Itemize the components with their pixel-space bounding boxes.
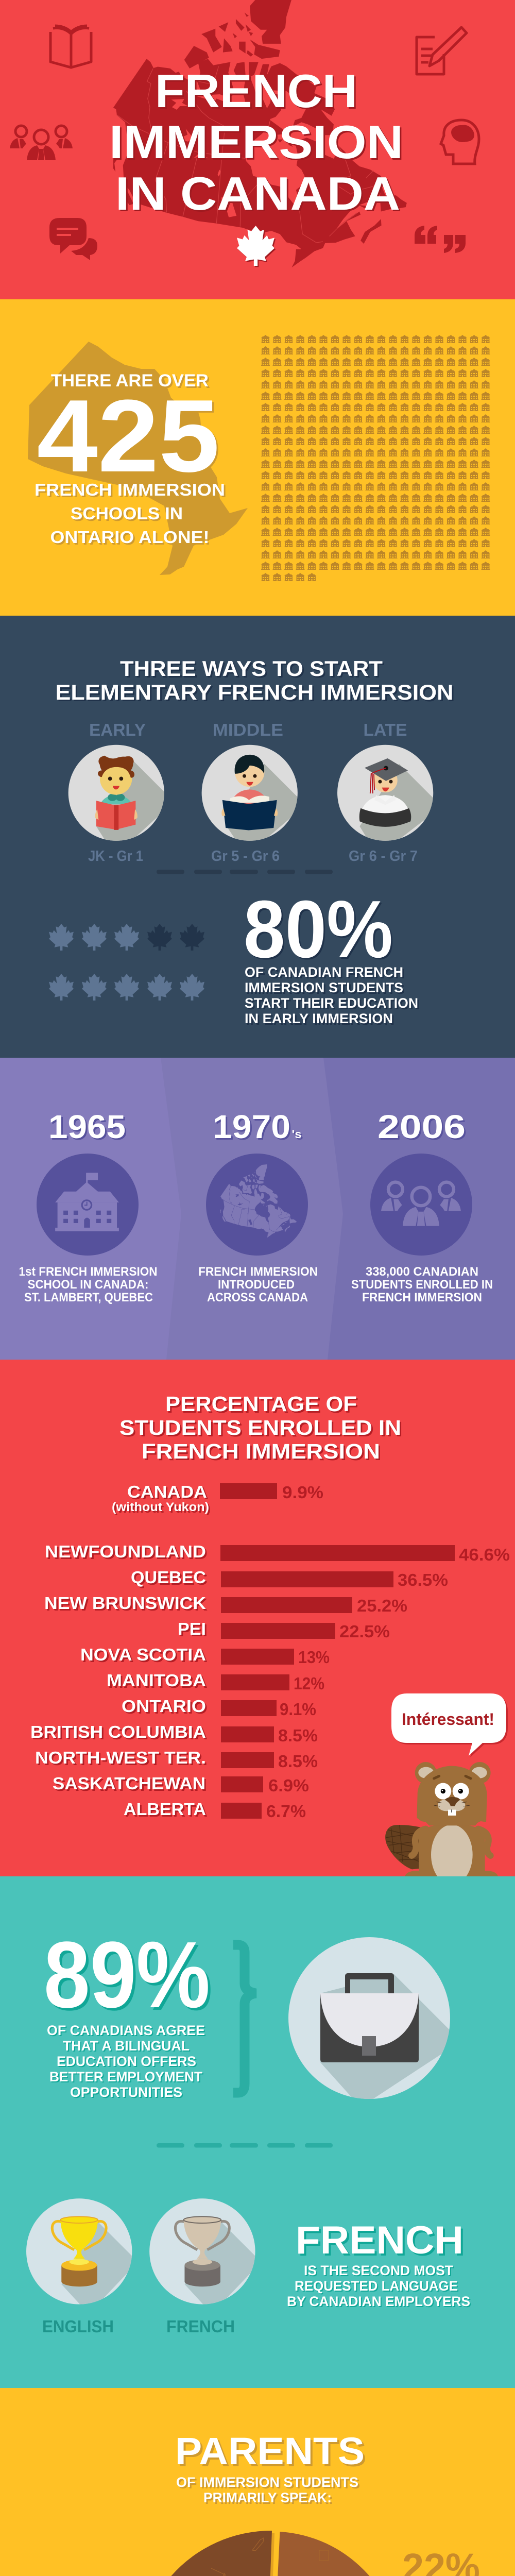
425 schools callout: THERE ARE OVER (51, 371, 209, 391)
icon: quotation marks (415, 226, 466, 253)
timeline: 1970s: INTRODUCED (218, 1278, 295, 1292)
trophy labels: ENGLISH (42, 2317, 114, 2336)
icon: group of people (10, 126, 73, 160)
timeline: 1965: 1st FRENCH IMMERSION (19, 1265, 158, 1279)
speech bubble: Intéressant! (402, 1710, 494, 1728)
timeline: 2006: 338,000 CANADIAN (366, 1265, 478, 1279)
pictogram: 425 school icons (261, 334, 493, 584)
heading: parents: PRIMARILY SPEAK: (203, 2490, 332, 2505)
pictogram: ten maple leaves (49, 924, 204, 1001)
425 schools callout: ONTARIO ALONE! (50, 528, 209, 547)
icon: gold trophy (26, 2198, 132, 2304)
bar chart labels: PEI (178, 1619, 206, 1638)
stage labels (89, 720, 407, 739)
bar chart labels: NORTH-WEST TER. (35, 1748, 206, 1767)
425 schools callout: FRENCH IMMERSION (35, 480, 225, 499)
bar chart labels (30, 1482, 209, 1819)
timeline: 1965: ST. LAMBERT, QUEBEC (24, 1291, 153, 1304)
heading: FRENCH IMMERSION (142, 1439, 380, 1463)
icon: silver trophy (149, 2198, 255, 2304)
stat: French second language: FRENCH (296, 2218, 464, 2262)
425 schools callout (35, 371, 225, 547)
stat: 80 percent: IN EARLY IMMERSION (245, 1011, 393, 1026)
bar chart values: 36.5% (398, 1570, 448, 1589)
bar chart values: 46.6% (459, 1545, 510, 1564)
heading: parents: PARENTS (175, 2430, 365, 2472)
section: enrolment percentages (0, 1360, 515, 1885)
bar chart labels: NOVA SCOTIA (80, 1645, 206, 1664)
bar chart labels: SASKATCHEWAN (53, 1774, 205, 1793)
stage labels: MIDDLE (213, 720, 283, 739)
bar chart bars (220, 1483, 455, 1819)
stat: 89 percent (44, 1922, 210, 2100)
stat: 80 percent: OF CANADIAN FRENCH (245, 964, 403, 980)
bar chart values: 9.1% (280, 1700, 316, 1719)
heading: PERCENTAGE OF (165, 1392, 357, 1416)
timeline: 1970s: FRENCH IMMERSION (198, 1265, 318, 1279)
grade range labels (88, 848, 418, 865)
section: parents (0, 2388, 515, 2576)
bar chart labels: ALBERTA (124, 1800, 206, 1819)
bar chart labels: (without Yukon) (112, 1500, 209, 1514)
stat: 89 percent: OPPORTUNITIES (70, 2084, 182, 2100)
heading: ELEMENTARY FRENCH IMMERSION (56, 680, 454, 704)
icon: small Canada map (220, 1164, 297, 1238)
stat: 89 percent: THAT A BILINGUAL (63, 2038, 190, 2054)
illustrations: students (68, 745, 434, 841)
grade range labels: Gr 6 - Gr 7 (349, 848, 418, 865)
illustration: beaver (385, 1762, 498, 1885)
timeline: 1965: SCHOOL IN CANADA: (28, 1278, 148, 1292)
stat: 80 percent: IMMERSION STUDENTS (245, 980, 403, 995)
icon: boy reading (202, 745, 298, 841)
section: three ways to start (0, 616, 515, 1058)
stat: 89 percent: BETTER EMPLOYMENT (49, 2069, 202, 2084)
pie slice: English (138, 2531, 306, 2576)
timeline: 2006: STUDENTS ENROLLED IN (351, 1278, 493, 1292)
bar chart labels: CANADA (127, 1482, 207, 1501)
stat: 89 percent: 89% (44, 1922, 210, 2027)
title text: IN CANADA (115, 168, 400, 220)
bar chart values: 6.7% (266, 1802, 306, 1821)
icon: notepad and pencil (417, 27, 467, 74)
pie chart (138, 2531, 403, 2576)
title text: FRENCH (155, 65, 357, 117)
timeline: 2006: 2006 (377, 1108, 466, 1145)
trophy labels (42, 2317, 235, 2336)
title text (109, 65, 403, 220)
brace (233, 1945, 256, 2093)
section: Ontario schools (0, 299, 515, 616)
bar chart labels: MANITOBA (107, 1671, 206, 1690)
bar chart values: 22.5% (339, 1622, 390, 1641)
icon: briefcase (288, 1937, 450, 2099)
heading: THREE WAYS TO START (120, 656, 383, 681)
timeline: 1965: 1965 (48, 1108, 126, 1145)
stat: French second language: REQUESTED LANGUAGE (295, 2278, 458, 2294)
icon: chat bubbles (49, 218, 97, 260)
bar chart values: 12% (294, 1674, 324, 1693)
bar chart labels: NEWFOUNDLAND (45, 1542, 206, 1561)
icon: head with brain (441, 120, 479, 164)
425 schools callout: SCHOOLS IN (71, 504, 183, 523)
trophy labels: FRENCH (166, 2317, 235, 2336)
stat: 89 percent: EDUCATION OFFERS (57, 2054, 196, 2069)
timeline: 1970s: 's (291, 1128, 302, 1141)
icon: students group (381, 1182, 461, 1226)
heading: parents: OF IMMERSION STUDENTS (176, 2475, 358, 2490)
bar chart values: 9.9% (282, 1483, 323, 1502)
icon: school (55, 1173, 119, 1231)
title text: IMMERSION (109, 116, 403, 168)
heading (119, 1392, 401, 1463)
timeline: 1970s (198, 1108, 318, 1304)
bar chart values: 6.9% (268, 1776, 309, 1795)
bar chart values: 25.2% (357, 1596, 407, 1615)
bar chart labels: NEW BRUNSWICK (44, 1594, 206, 1613)
stat: French second language: IS THE SECOND MOST (304, 2263, 453, 2278)
map of Canada behind title (113, 0, 407, 267)
pie slice: French (273, 2532, 401, 2576)
heading: parents (175, 2430, 365, 2505)
stat: 89 percent: OF CANADIANS AGREE (47, 2023, 205, 2038)
bar chart labels: QUEBEC (131, 1568, 206, 1587)
425 schools callout: 425 (37, 379, 219, 494)
section: employment (0, 1876, 515, 2388)
stage labels: EARLY (89, 720, 146, 739)
bar chart labels: BRITISH COLUMBIA (30, 1722, 206, 1741)
stat: 80 percent: 80% (244, 884, 393, 975)
grade range labels: Gr 5 - Gr 6 (211, 848, 280, 865)
bar chart labels: ONTARIO (122, 1697, 206, 1716)
stat: 80 percent: START THEIR EDUCATION (245, 995, 418, 1011)
stat: French second language: BY CANADIAN EMPLOYERS (287, 2294, 470, 2309)
timeline: 1970s: ACROSS CANADA (207, 1291, 308, 1304)
stat: 80 percent (244, 884, 418, 1026)
icon: open book (50, 26, 91, 67)
trophies (26, 2198, 255, 2304)
bar chart values: 13% (298, 1648, 330, 1667)
grade range labels: JK - Gr 1 (88, 848, 143, 865)
map of Ontario (28, 342, 248, 575)
timeline: 2006 (351, 1108, 493, 1304)
section: title header (0, 0, 515, 299)
bar chart values (266, 1483, 510, 1821)
speech bubble (391, 1693, 506, 1756)
timeline: 2006: FRENCH IMMERSION (362, 1291, 482, 1304)
bar chart values: 8.5% (278, 1752, 318, 1771)
icon: girl reading (68, 745, 164, 841)
timeline: 1965 (19, 1108, 158, 1304)
section: timeline (0, 1058, 515, 1360)
icon: maple leaf (237, 226, 274, 266)
icon: graduate (337, 745, 434, 841)
heading: STUDENTS ENROLLED IN (119, 1416, 401, 1439)
heading (56, 656, 454, 704)
stage labels: LATE (364, 720, 407, 739)
stat: French second language (287, 2218, 470, 2309)
bar chart values: 8.5% (278, 1726, 318, 1745)
timeline: 1970s: 1970 (213, 1108, 290, 1145)
